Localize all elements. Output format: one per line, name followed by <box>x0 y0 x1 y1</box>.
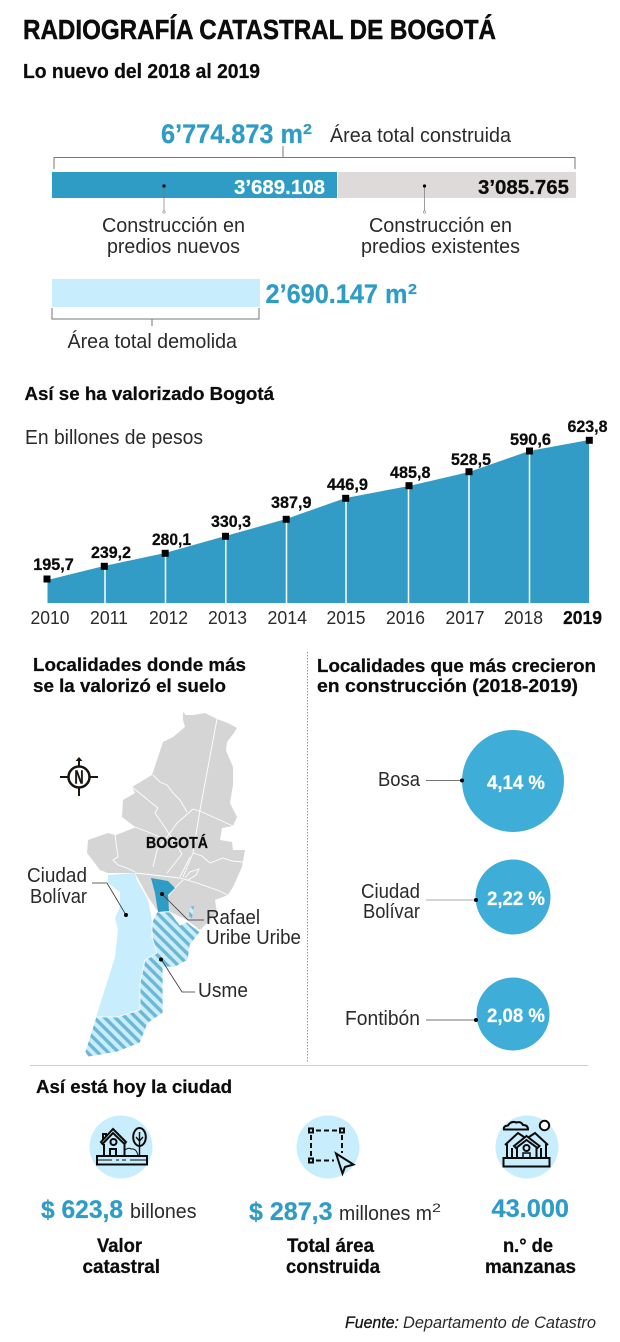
subtitle: Lo nuevo del 2018 al 2019 <box>23 61 260 83</box>
callout: Ciudad Bolívar: Ciudad <box>27 865 87 887</box>
bubble: Bosa <box>378 730 564 832</box>
year labels: 2019 <box>563 608 602 628</box>
map: Ciudad Bolívar <box>96 873 157 1017</box>
label: new properties: Construcción en <box>102 215 245 237</box>
data values <box>33 418 608 574</box>
stat: total built area: Total área <box>287 1236 374 1257</box>
source: Fuente: <box>345 1314 399 1332</box>
heading: city today: Así está hoy la ciudad <box>36 1077 232 1097</box>
bar: new properties <box>52 172 337 198</box>
callout: Usme <box>159 958 248 1002</box>
title: RADIOGRAFÍA CATASTRAL DE BOGOTÁ <box>23 14 496 45</box>
data values: 280,1 <box>152 531 191 549</box>
stat: total built area: millones m <box>339 1203 432 1225</box>
year labels: 2010 <box>30 608 70 628</box>
icon: houses <box>496 1116 558 1178</box>
value: new properties: 3’689.108 <box>234 176 325 199</box>
label: new properties <box>102 215 245 258</box>
heading: valuation chart: Así se ha valorizado Bogotá <box>24 383 275 404</box>
bubble: Ciudad Bolívar: Bolívar <box>363 901 420 923</box>
stat: city blocks: manzanas <box>485 1257 576 1278</box>
data values: 330,3 <box>211 513 251 531</box>
year labels: 2012 <box>149 608 188 628</box>
pointer: new properties <box>162 184 166 213</box>
year labels: 2018 <box>504 608 543 628</box>
bubble: Bosa: Bosa <box>378 769 421 791</box>
icon: compass <box>60 757 98 796</box>
demolished figure: 2 <box>408 281 417 298</box>
year labels: 2017 <box>446 608 484 628</box>
callout: Rafael Uribe Uribe <box>160 892 301 949</box>
bar: existing properties <box>338 172 576 198</box>
demolished label: Área total demolida <box>68 330 238 353</box>
bubble: Ciudad Bolívar: Ciudad <box>361 881 420 903</box>
stat: cadastral value: Valor <box>97 1236 143 1257</box>
pointer: existing properties <box>423 184 426 213</box>
year labels: 2013 <box>208 608 247 628</box>
chart unit note: En billones de pesos <box>25 427 203 449</box>
year labels: 2015 <box>326 608 366 628</box>
label: existing properties <box>361 215 520 258</box>
callout: Ciudad Bolívar: Bolívar <box>30 886 87 908</box>
year separators <box>105 453 530 603</box>
bubble: Ciudad Bolívar: 2,22 % <box>487 889 545 910</box>
year labels: 2011 <box>90 608 128 628</box>
map label: BOGOTÁ: BOGOTÁ <box>146 833 208 852</box>
total built figure: 2 <box>303 121 312 138</box>
icon: compass: N <box>74 768 84 788</box>
heading: construction growth <box>317 656 596 696</box>
map: city localities <box>87 712 245 930</box>
total built label: Área total construida <box>330 124 512 147</box>
stat: cadastral value: billones <box>130 1201 196 1223</box>
callout: Ciudad Bolívar <box>27 865 128 917</box>
icon: selection area <box>296 1116 360 1178</box>
data values: 528,5 <box>451 451 491 469</box>
year labels: 2016 <box>386 608 425 628</box>
callout: Usme: Usme <box>198 980 248 1002</box>
heading: land valuation <box>33 655 246 696</box>
heading: construction growth: Localidades que más crecieron <box>317 656 596 676</box>
data values: 623,8 <box>568 418 608 436</box>
bubble: Bosa: 4,14 % <box>487 773 545 794</box>
data values: 485,8 <box>390 464 430 482</box>
lower bracket <box>52 308 259 326</box>
stat: total built area <box>249 1198 441 1278</box>
data values: 387,9 <box>271 494 312 512</box>
bar: demolished area <box>52 279 260 307</box>
total built figure: 6’774.873 m <box>161 119 303 149</box>
stat: city blocks: n.° de <box>503 1236 553 1257</box>
heading: construction growth: en construcción (2018-2019) <box>317 676 578 696</box>
map: Usme <box>85 912 200 1057</box>
data values: 446,9 <box>327 476 368 494</box>
top bracket <box>54 146 575 169</box>
stat: cadastral value: $ 623,8 <box>41 1196 123 1224</box>
data values: 239,2 <box>91 544 131 562</box>
icon: house and tree <box>90 1116 152 1178</box>
demolished figure: 2’690.147 m <box>266 279 408 309</box>
year labels <box>30 608 602 628</box>
stat: cadastral value: catastral <box>82 1257 160 1278</box>
data values: 195,7 <box>33 556 74 574</box>
callout: Rafael Uribe Uribe: Rafael <box>206 907 260 929</box>
stat: city blocks <box>485 1195 576 1278</box>
area <box>48 440 589 603</box>
stat: city blocks: 43.000 <box>492 1195 569 1223</box>
heading: land valuation: Localidades donde más <box>33 655 246 675</box>
year labels: 2014 <box>268 608 307 628</box>
data markers <box>44 437 593 582</box>
area chart: cadastral value 2010-2019 <box>30 418 608 628</box>
map: Rafael Uribe Uribe <box>151 878 175 912</box>
heading: land valuation: se la valorizó el suelo <box>33 676 226 696</box>
panel: built and demolished area <box>52 119 576 353</box>
label: existing properties: predios existentes <box>361 236 520 258</box>
data values: 590,6 <box>510 431 551 449</box>
map: Usme northern fragment <box>189 906 194 918</box>
stat: total built area: 2 <box>432 1201 441 1215</box>
bubble: Fontibón: Fontibón <box>345 1008 420 1030</box>
stat: cadastral value <box>41 1196 196 1278</box>
stat: total built area: construida <box>286 1257 380 1278</box>
label: existing properties: Construcción en <box>369 215 512 237</box>
bubble: Fontibón: 2,08 % <box>487 1006 545 1027</box>
map of Bogotá <box>27 712 301 1057</box>
value: existing properties: 3’085.765 <box>478 176 569 199</box>
bubble: Ciudad Bolívar <box>361 860 550 934</box>
map: locality borders <box>113 719 243 896</box>
bubble: Fontibón <box>345 978 550 1050</box>
stat: total built area: $ 287,3 <box>249 1198 332 1226</box>
callout: Rafael Uribe Uribe: Uribe Uribe <box>206 927 301 949</box>
label: new properties: predios nuevos <box>107 236 240 258</box>
source: Departamento de Catastro <box>403 1314 596 1332</box>
